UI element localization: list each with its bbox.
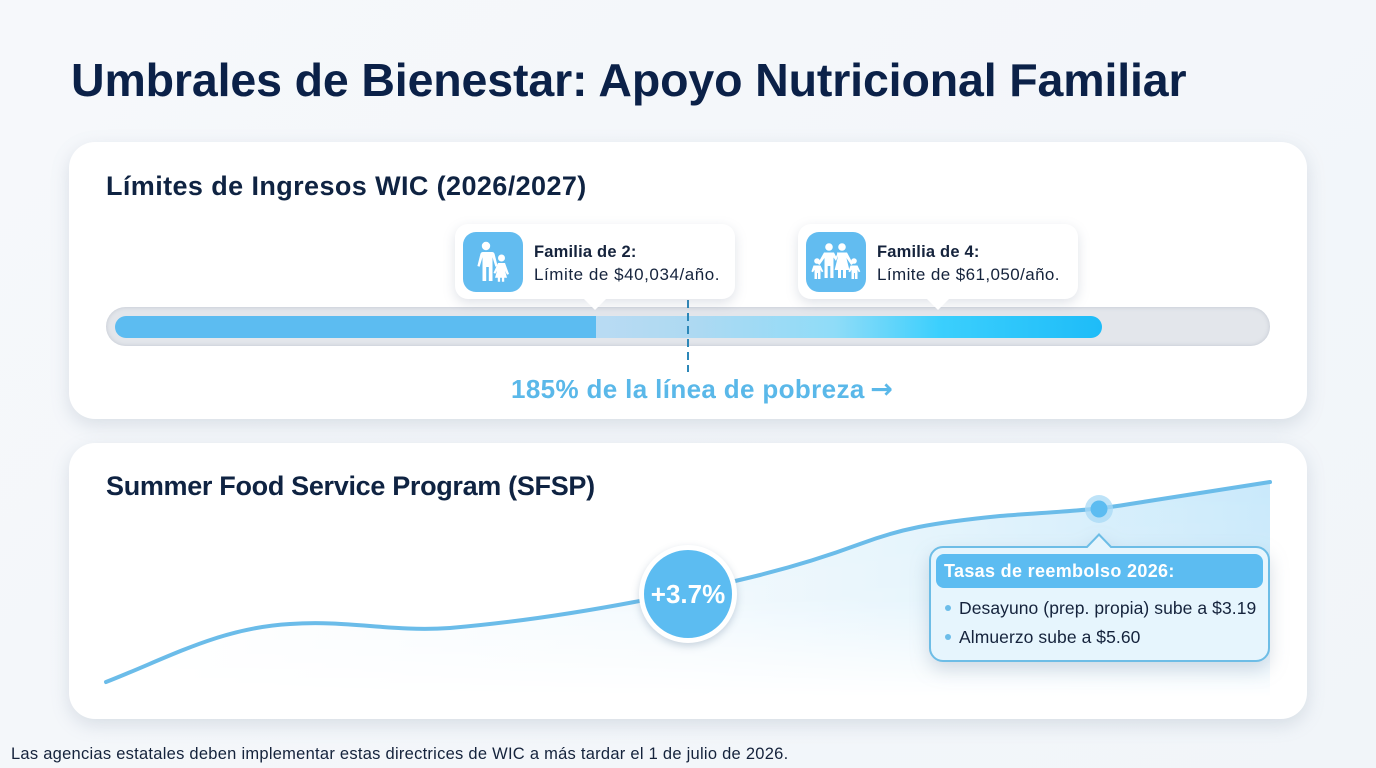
icon: family of four bbox=[806, 232, 866, 292]
badge: +3.7%: +3.7% bbox=[651, 579, 725, 609]
label: 185% poverty line: 185% de la línea de pobreza → bbox=[511, 374, 893, 405]
badge: +3.7% bbox=[639, 545, 737, 643]
footer note: Las agencias estatales deben implementar estas directrices de WIC a más tardar el 1 de julio de 2026. bbox=[11, 745, 788, 763]
title: Umbrales de Bienestar: Apoyo Nutricional Familiar bbox=[71, 54, 1186, 106]
poverty line marker bbox=[687, 300, 689, 372]
text: family of 4: Límite de $61,050/año. bbox=[877, 265, 1060, 284]
heading: WIC: Límites de Ingresos WIC (2026/2027) bbox=[106, 171, 587, 201]
text: family of 2: Familia de 2: bbox=[534, 243, 637, 261]
callout header bbox=[936, 554, 1263, 588]
progress bar track bbox=[106, 307, 1270, 346]
bullet list bbox=[945, 598, 1256, 647]
panel: SFSP bbox=[69, 443, 1307, 719]
chart area bbox=[564, 484, 1270, 679]
callout: reimbursement rates bbox=[922, 533, 1277, 677]
bullet list: Desayuno (prep. propia) sube a $3.19 bbox=[959, 598, 1256, 618]
line chart bbox=[104, 480, 1272, 684]
heading: SFSP: Summer Food Service Program (SFSP) bbox=[106, 471, 595, 501]
text: family of 4 bbox=[877, 243, 1060, 284]
icon: parent and child bbox=[463, 232, 523, 292]
text: family of 4: Familia de 4: bbox=[877, 243, 980, 261]
tooltip: family of 4 bbox=[798, 224, 1078, 299]
data point bbox=[1085, 495, 1113, 523]
text: family of 2 bbox=[534, 243, 720, 284]
progress bar fill bbox=[115, 316, 1102, 338]
bullet list: Almuerzo sube a $5.60 bbox=[959, 627, 1140, 647]
panel: WIC income limits bbox=[69, 142, 1307, 419]
callout header: Tasas de reembolso 2026: bbox=[944, 561, 1175, 581]
text: family of 2: Límite de $40,034/año. bbox=[534, 265, 720, 284]
chart line bbox=[106, 482, 1270, 682]
tooltip: family of 2 bbox=[455, 224, 735, 299]
